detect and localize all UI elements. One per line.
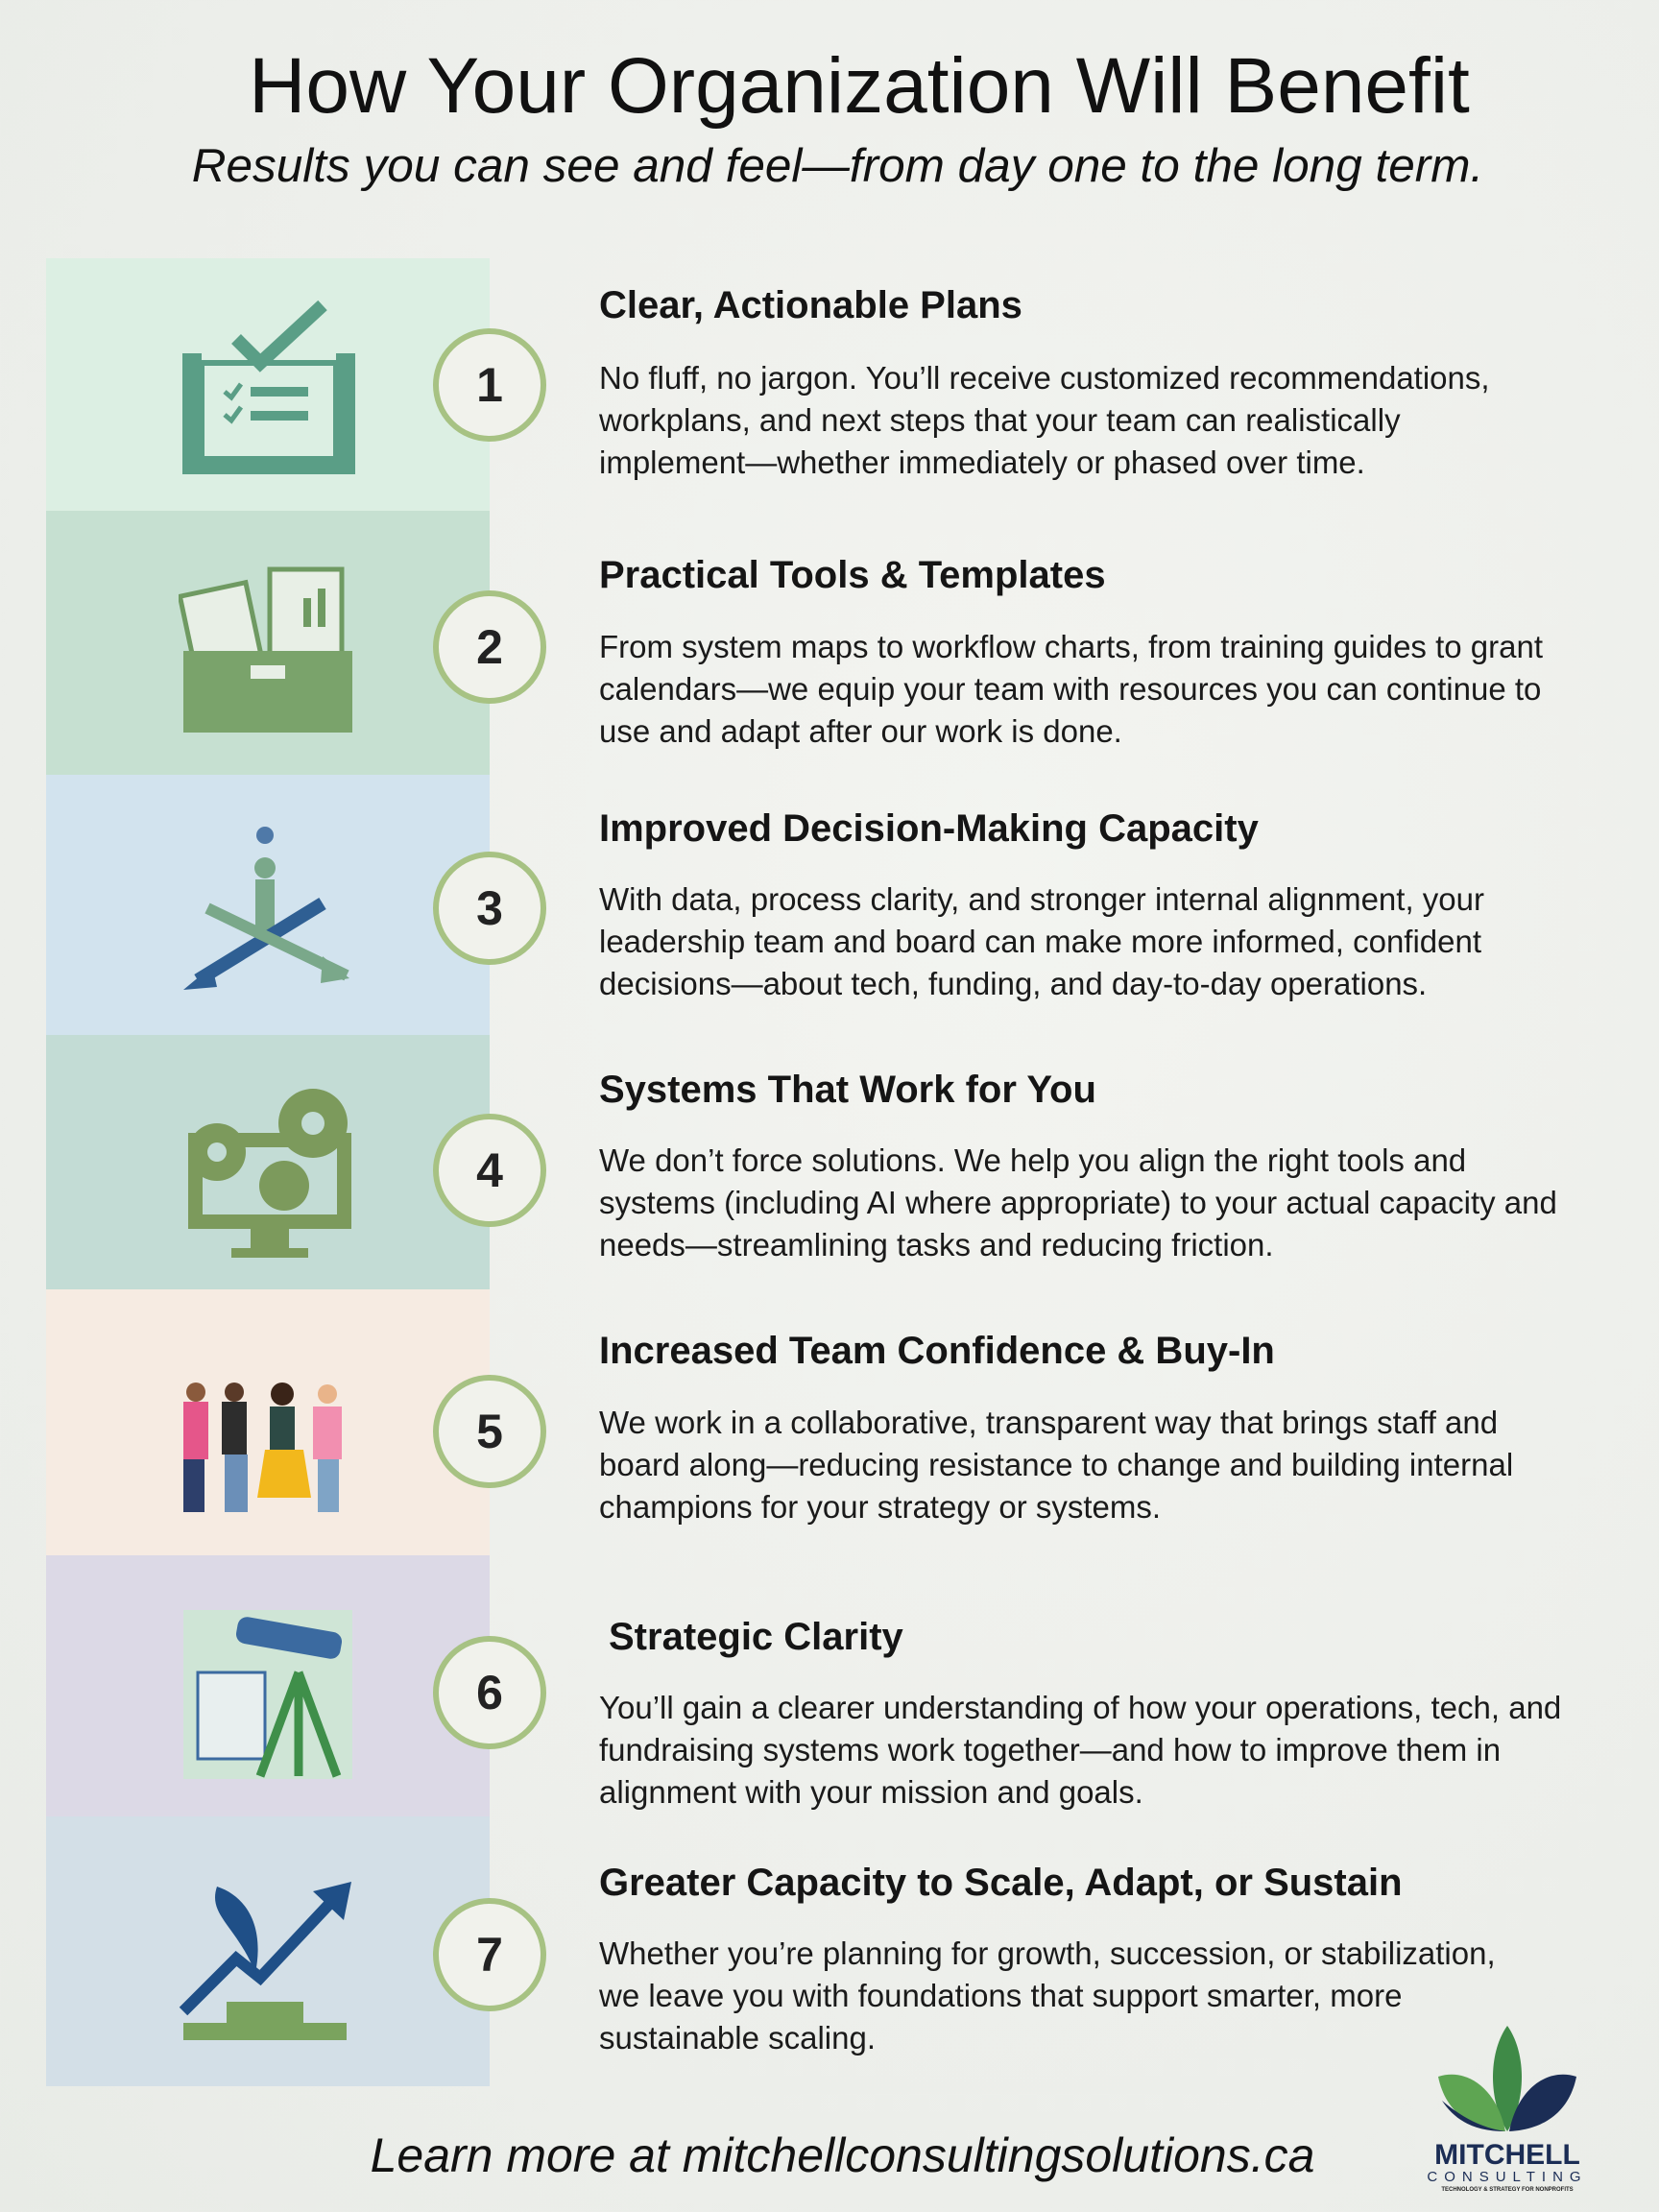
- text 1: No fluff, no jargon. You’ll receive customized recommendations,: [599, 360, 1490, 396]
- text 2: [599, 629, 1543, 749]
- heading 6: Strategic Clarity: [609, 1616, 903, 1658]
- text 6: [599, 1690, 1561, 1810]
- text 7: we leave you with foundations that support smarter, more: [599, 1978, 1402, 2013]
- text 3: With data, process clarity, and stronger internal alignment, your: [599, 881, 1484, 917]
- heading 7: Greater Capacity to Scale, Adapt, or Sustain: [599, 1862, 1403, 1904]
- icon: tools box: [179, 566, 352, 733]
- circle numbers: 5: [476, 1405, 503, 1458]
- text 3: leadership team and board can make more informed, confident: [599, 924, 1481, 959]
- heading 2: Practical Tools & Templates: [599, 554, 1106, 596]
- icon: gears monitor: [188, 1089, 351, 1258]
- text 3: [599, 881, 1484, 1001]
- circle numbers: 7: [476, 1928, 503, 1982]
- circle numbers: 6: [476, 1666, 503, 1719]
- logo: CONSULTING: [1427, 2169, 1588, 2185]
- text 4: [599, 1142, 1557, 1262]
- circle numbers: 1: [476, 358, 503, 412]
- text 7: Whether you’re planning for growth, succession, or stabilization,: [599, 1936, 1496, 1971]
- circle numbers: [433, 328, 546, 2011]
- heading 4: Systems That Work for You: [599, 1069, 1096, 1111]
- text 6: fundraising systems work together—and how to improve them in: [599, 1732, 1501, 1767]
- icon: plan checklist: [182, 300, 355, 474]
- text 5: [599, 1405, 1513, 1525]
- logo: MITCHELL: [1434, 2139, 1580, 2171]
- text 4: needs—streamlining tasks and reducing friction.: [599, 1227, 1274, 1262]
- logo: [1427, 2026, 1588, 2193]
- circle numbers: 4: [476, 1143, 503, 1197]
- text 1: [599, 360, 1490, 480]
- text 2: calendars—we equip your team with resources you can continue to: [599, 671, 1541, 707]
- icon: decision arrows: [183, 827, 349, 990]
- text 7: sustainable scaling.: [599, 2020, 876, 2056]
- circle numbers: 3: [476, 881, 503, 935]
- heading 3: Improved Decision-Making Capacity: [599, 807, 1259, 850]
- text 3: decisions—about tech, funding, and day-to-day operations.: [599, 966, 1427, 1001]
- text 6: You’ll gain a clearer understanding of how your operations, tech, and: [599, 1690, 1561, 1725]
- panel: row backgrounds: [46, 258, 490, 2086]
- text 1: implement—whether immediately or phased over time.: [599, 445, 1365, 480]
- circle numbers: 2: [476, 620, 503, 674]
- heading 1: Clear, Actionable Plans: [599, 284, 1022, 326]
- footer link: Learn more at mitchellconsultingsolutions.ca: [371, 2128, 1314, 2182]
- text 5: champions for your strategy or systems.: [599, 1489, 1161, 1525]
- title: How Your Organization Will Benefit: [249, 42, 1470, 130]
- icon: telescope: [183, 1610, 352, 1779]
- text 5: We work in a collaborative, transparent way that brings staff and: [599, 1405, 1498, 1440]
- subtitle: Results you can see and feel—from day one to the long term.: [192, 139, 1483, 192]
- text 6: alignment with your mission and goals.: [599, 1774, 1143, 1810]
- logo: TECHNOLOGY & STRATEGY FOR NONPROFITS: [1441, 2187, 1574, 2193]
- icon: team celebrating: [183, 1382, 342, 1512]
- text 5: board along—reducing resistance to change and building internal: [599, 1447, 1513, 1482]
- text 2: use and adapt after our work is done.: [599, 713, 1122, 749]
- text 4: We don’t force solutions. We help you align the right tools and: [599, 1142, 1466, 1178]
- text 1: workplans, and next steps that your team can realistically: [599, 402, 1401, 438]
- text 4: systems (including AI where appropriate) to your actual capacity and: [599, 1185, 1557, 1220]
- text 2: From system maps to workflow charts, from training guides to grant: [599, 629, 1543, 664]
- text 7: [599, 1936, 1496, 2056]
- heading 5: Increased Team Confidence & Buy-In: [599, 1330, 1275, 1372]
- icon: growth arrow: [179, 1882, 351, 2040]
